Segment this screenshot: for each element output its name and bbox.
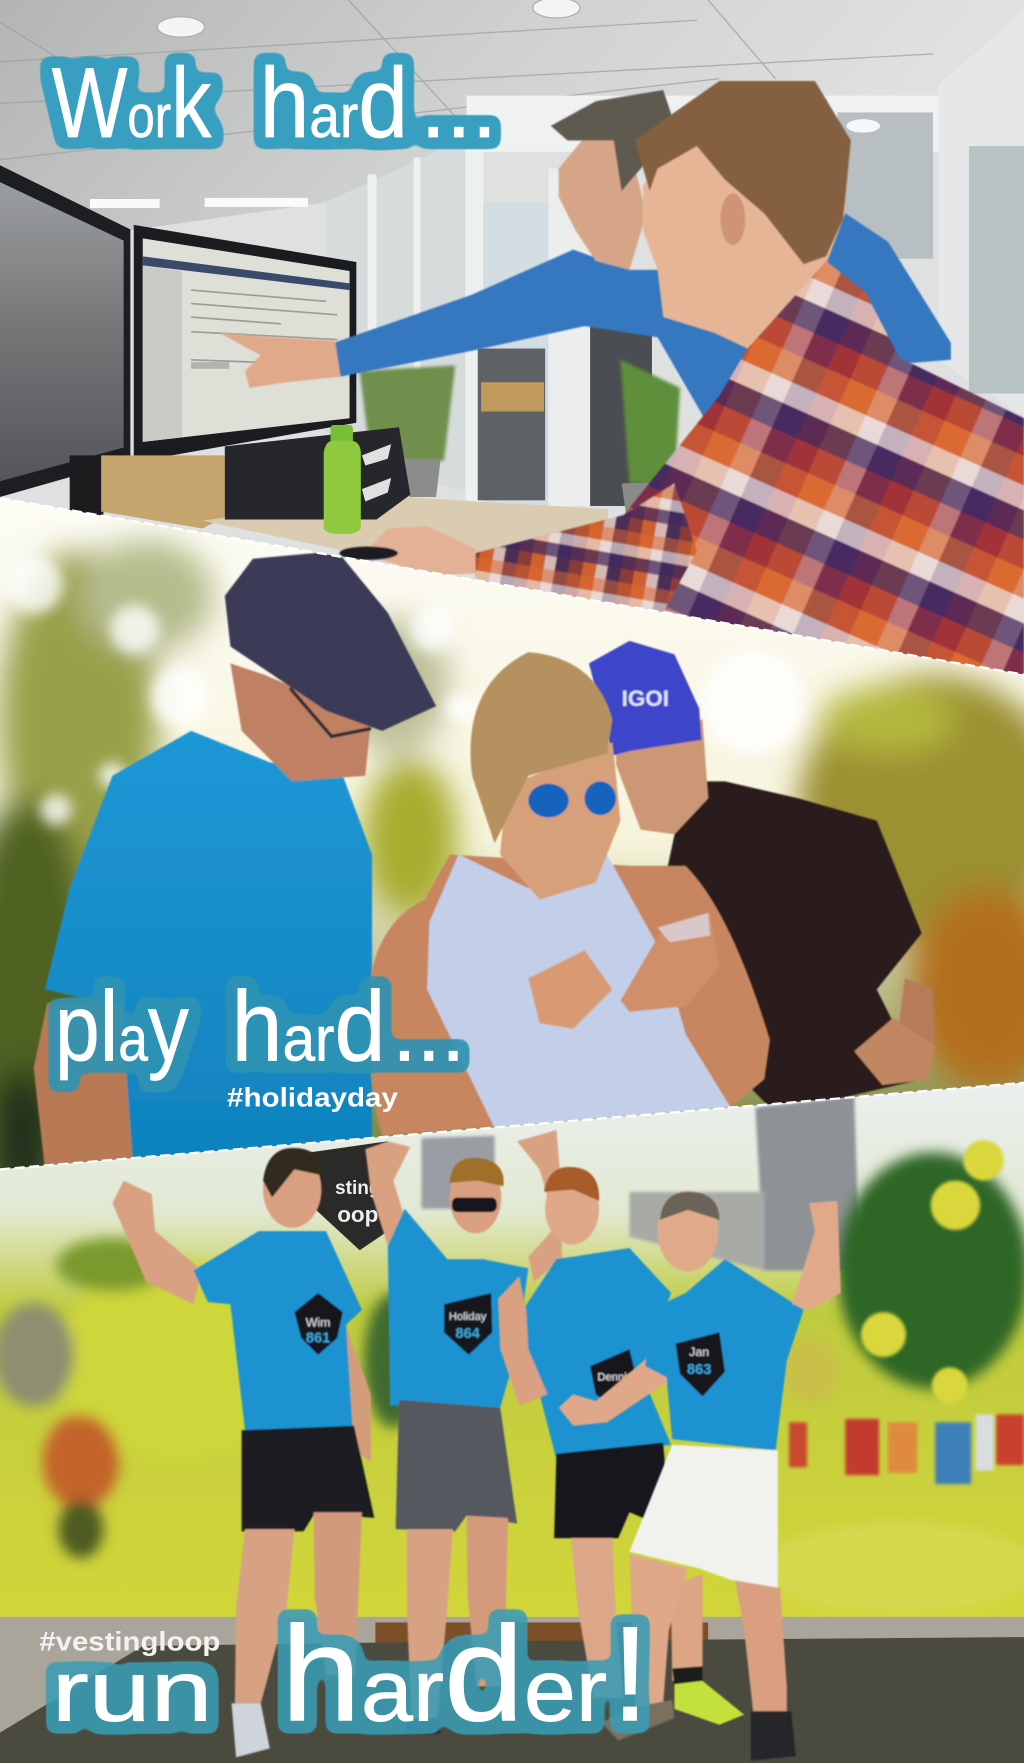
torn edge dashes (0, 498, 1024, 1169)
runner: Jan 863 (559, 1191, 841, 1761)
heading: Work hard...: ... (420, 54, 497, 157)
heading: Work hard... (52, 47, 497, 158)
heading: play hard... (55, 970, 465, 1081)
hashtag: holidayday: #holidayday (227, 1082, 398, 1112)
panel: vesting loop run photo (0, 1079, 1024, 1763)
man in blue shirt pointing (219, 90, 951, 444)
distant crowd of runners (789, 1414, 1024, 1484)
runner: Wim 861: Wim (306, 1316, 330, 1330)
hashtag: vestingloop: #vestingloop (39, 1627, 220, 1657)
man in black shirt and blue cap (589, 641, 935, 1113)
right monitor with web page (134, 225, 356, 462)
heading: Work hard...: Work (52, 47, 212, 158)
ceiling lights (157, 0, 580, 37)
heading: run harder!: harder (281, 1598, 607, 1749)
runner: Wim 861: 861 (306, 1330, 330, 1346)
back office interior and plants (358, 326, 682, 514)
paved floor and stage (0, 1617, 1024, 1763)
runner: Jan 863: 863 (687, 1362, 711, 1378)
heading: run harder!: run (52, 1644, 212, 1739)
woman with sunglasses looking at phone (368, 652, 770, 1136)
left monitor (0, 165, 130, 523)
heading: run harder!: ! (611, 1598, 649, 1749)
runner: Holiday 864: Holiday (449, 1311, 487, 1323)
icon: green water bottle (324, 425, 361, 534)
heading: play hard...: play (55, 970, 189, 1081)
panel: office photo (0, 0, 1024, 686)
runner: Jan 863: Jan (689, 1345, 709, 1359)
runner: Holiday 864: 864 (455, 1326, 481, 1342)
sunny tree background (0, 495, 1024, 1203)
panel: holiday day photo (0, 495, 1024, 1203)
banner background with trees and runners (0, 1079, 1024, 1630)
heading: run harder! (52, 1598, 649, 1749)
man in black shirt and blue cap: IGOI (622, 686, 669, 711)
heading: play hard...: hard (232, 970, 386, 1081)
runner: Dennis: Dennis (597, 1372, 633, 1384)
runner: Holiday 864 (365, 1130, 562, 1734)
ceiling and walls (0, 0, 1024, 675)
banner background with trees and runners: sting (335, 1178, 381, 1199)
runner: Dennis (498, 1167, 671, 1698)
banner background with trees and runners: oop (337, 1202, 378, 1227)
runner: Wim 861 (112, 1148, 374, 1757)
man in blue tee and cap (34, 551, 436, 1169)
heading: play hard...: ... (392, 981, 465, 1079)
heading: Work hard...: hard (260, 47, 408, 158)
young man in plaid shirt (339, 81, 1024, 686)
desk and storage trays (101, 427, 608, 568)
